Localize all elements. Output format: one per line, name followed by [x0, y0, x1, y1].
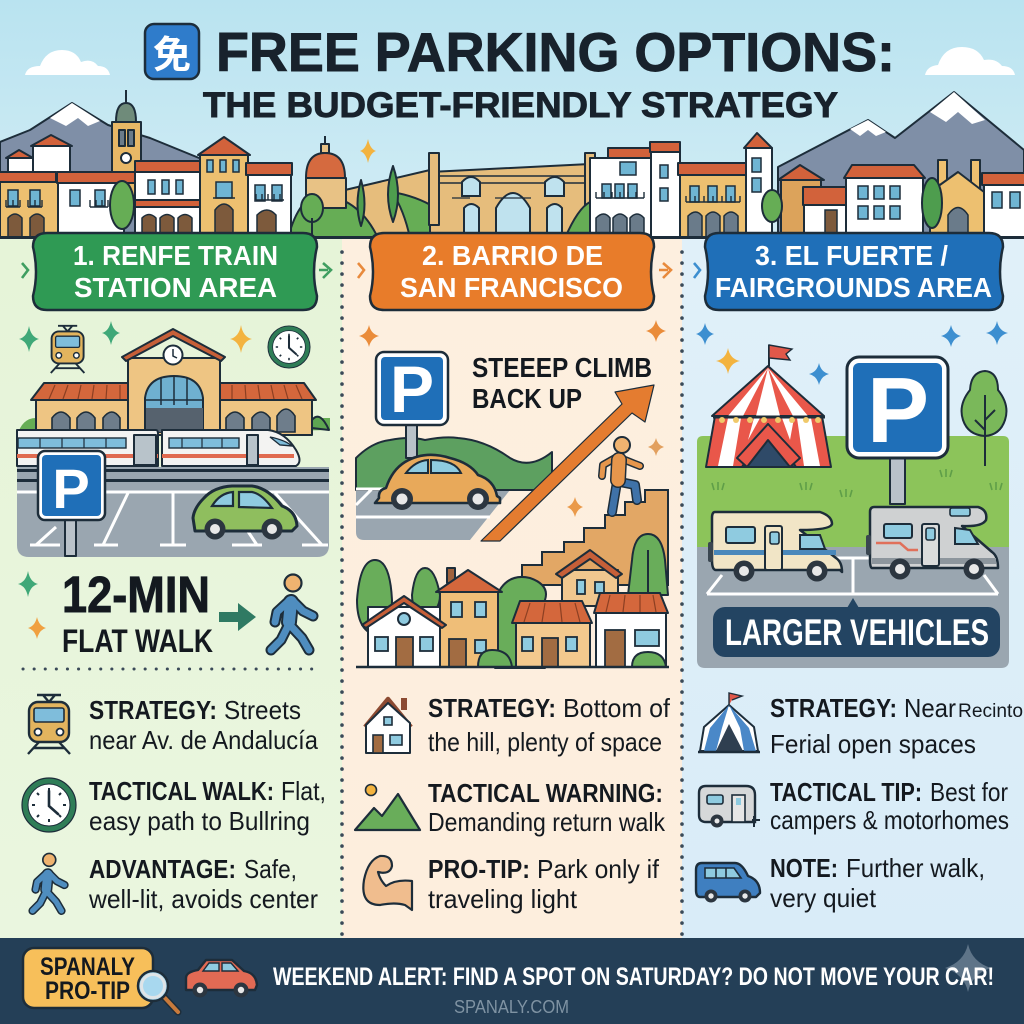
row: note	[696, 853, 985, 913]
icon: magnifier	[165, 998, 178, 1012]
heading badge 3: FAIRGROUNDS AREA	[715, 272, 992, 303]
row: strategy column 2: STRATEGY:	[428, 693, 556, 723]
tree	[962, 371, 1006, 436]
dome	[306, 178, 346, 208]
row: strategy column 1: STRATEGY:	[89, 695, 217, 725]
walk time callout	[18, 566, 313, 659]
row: pro-tip column 2: traveling light	[428, 884, 578, 914]
icon: sparkle above bridge	[360, 139, 376, 163]
row: advantage: ADVANTAGE:	[89, 854, 236, 884]
row: tactical warning: TACTICAL WARNING:	[428, 778, 663, 808]
column dividers	[342, 252, 682, 938]
row: tactical tip column 3	[699, 777, 1009, 835]
climb arrow	[481, 385, 654, 541]
heading badge 3	[705, 233, 1003, 310]
background: sky and town band	[0, 0, 1024, 240]
row: tactical tip column 3: TACTICAL TIP:	[770, 777, 922, 807]
row: tactical walk: easy path to Bullring	[89, 806, 310, 836]
walk time callout: 12-MIN	[62, 566, 210, 623]
heading badge 1: 1. RENFE TRAIN	[73, 240, 278, 271]
row: advantage: Safe,	[244, 854, 297, 884]
right buildings	[590, 158, 652, 238]
callout: steep climb: BACK UP	[472, 383, 582, 414]
heading badge 2	[370, 233, 654, 310]
heading badge 3: 3. EL FUERTE /	[755, 240, 948, 271]
site credit: SPANALY.COM	[454, 997, 569, 1017]
icons: badge chevrons and arrows	[22, 263, 700, 278]
row: strategy column 3	[698, 693, 1023, 759]
row: tactical walk	[22, 776, 326, 836]
panel: column 1 background	[0, 238, 342, 938]
tent	[768, 345, 770, 366]
bridge	[430, 164, 590, 238]
footer band: PRO-TIP	[45, 977, 130, 1005]
walk time callout: FLAT WALK	[62, 623, 213, 659]
tower	[112, 122, 141, 202]
callout: steep climb: STEEEP CLIMB	[472, 352, 652, 383]
left buildings	[8, 158, 34, 176]
icon: left cloud	[25, 50, 110, 75]
camper 1	[712, 512, 842, 572]
illustration: steep climb scene: P	[390, 352, 434, 426]
illustration: fairgrounds scene: P	[867, 358, 929, 462]
heading badge 1	[33, 233, 317, 310]
road panel	[356, 490, 510, 540]
far hills	[345, 170, 430, 238]
icon: title badge: 免	[153, 35, 191, 77]
heading badge 2: 2. BARRIO DE	[422, 240, 603, 271]
footer band: SPANALY	[40, 953, 135, 981]
green trees	[301, 194, 323, 222]
train	[17, 430, 158, 466]
row: advantage: well-lit, avoids center	[88, 884, 318, 914]
panel: column 2 background	[342, 238, 682, 938]
icon: red car	[186, 960, 257, 998]
car	[193, 486, 297, 540]
P sign	[406, 424, 417, 458]
P sign	[65, 518, 76, 556]
row: pro-tip column 2: PRO-TIP:	[428, 854, 530, 884]
icon: small train	[51, 326, 84, 373]
heading badge 1: STATION AREA	[74, 272, 277, 303]
row: strategy column 2: the hill, plenty of space	[428, 727, 662, 757]
beetle car	[375, 455, 500, 503]
row: tactical tip column 3: Best for	[930, 777, 1008, 807]
row: note: Further walk,	[846, 853, 985, 883]
row: strategy column 1: Streets	[224, 695, 301, 725]
icon: title badge	[145, 24, 199, 79]
row: strategy column 3: Near	[904, 693, 956, 723]
row: note: NOTE:	[770, 853, 838, 883]
icon: right cloud	[925, 47, 1015, 75]
illustration: Renfe station scene: P	[52, 457, 90, 520]
subtitle: THE BUDGET-FRIENDLY STRATEGY	[203, 86, 838, 125]
row: strategy column 3: STRATEGY:	[770, 693, 897, 723]
dotted separator	[23, 668, 318, 670]
row: pro-tip column 2: Park only if	[537, 854, 660, 884]
camper 2	[870, 507, 998, 568]
illustration: fairgrounds scene	[696, 321, 1009, 668]
row: tactical warning	[355, 778, 666, 837]
row: advantage	[33, 853, 318, 914]
row: strategy column 2: Bottom of	[563, 693, 671, 723]
house yellow	[440, 590, 498, 667]
row: note: very quiet	[770, 883, 877, 913]
label: larger vehicles	[847, 598, 859, 608]
panel: column 3 background	[682, 238, 1024, 938]
trees and bushes	[357, 560, 392, 635]
town skyline illustration	[0, 90, 1024, 238]
row: tactical warning: Demanding return walk	[428, 807, 666, 837]
row: strategy column 1	[28, 695, 318, 755]
road and lot	[17, 467, 329, 557]
row: strategy column 1: near Av. de Andalucía	[89, 725, 318, 755]
title: FREE PARKING OPTIONS:	[216, 21, 895, 83]
lot lines	[707, 558, 998, 594]
P sign	[890, 456, 905, 504]
illustration: Renfe station scene	[17, 321, 330, 557]
stairs	[522, 490, 668, 585]
station wings	[36, 400, 312, 435]
house white	[368, 607, 440, 667]
grass and lot panel	[697, 436, 1009, 547]
house tan back	[562, 570, 618, 606]
watermark sparkle	[945, 944, 991, 992]
climber	[602, 457, 640, 512]
footer band	[0, 938, 1024, 1024]
row: tactical walk: TACTICAL WALK:	[89, 776, 274, 806]
row: strategy column 2	[365, 693, 671, 757]
row: pro-tip column 2	[363, 854, 660, 914]
callout: steep climb	[472, 352, 652, 414]
row: tactical walk: Flat,	[281, 776, 326, 806]
row: strategy column 3: Recinto	[958, 701, 1023, 722]
houses front	[516, 623, 590, 667]
icon: clock	[268, 326, 310, 368]
station centre	[128, 358, 220, 435]
illustration: steep climb scene	[356, 320, 669, 668]
sparkles	[696, 323, 714, 345]
heading badge 2: SAN FRANCISCO	[400, 272, 623, 303]
row: strategy column 3: Ferial open spaces	[770, 729, 976, 759]
pro-tip badge	[23, 948, 153, 1008]
